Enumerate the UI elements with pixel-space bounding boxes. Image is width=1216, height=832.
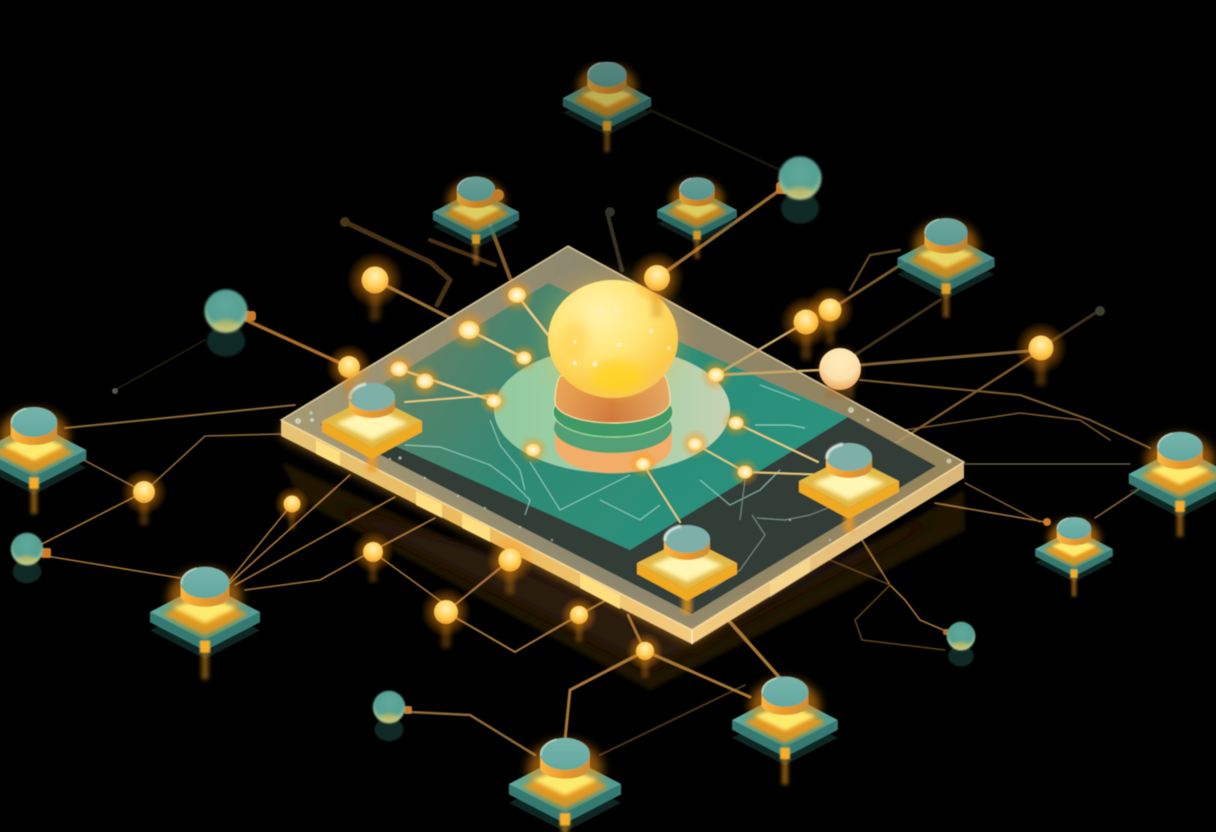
plate reflection shadow bbox=[282, 462, 965, 690]
dim background wires bbox=[115, 110, 1100, 755]
reflection under sphere bbox=[555, 425, 672, 473]
plate glow bbox=[281, 422, 964, 646]
plate left side bbox=[281, 420, 692, 644]
node: top centre bbox=[563, 62, 651, 152]
glass chip plate bbox=[281, 246, 964, 646]
large pale ball bbox=[813, 342, 867, 399]
plate top surface bbox=[281, 246, 964, 630]
surface speckles bbox=[295, 407, 952, 541]
node: bottom centre bbox=[509, 738, 621, 832]
on-plate wires bbox=[399, 295, 840, 522]
node: far right bbox=[1129, 432, 1216, 537]
plate rim highlight bbox=[281, 246, 964, 630]
glowing junction balls off plate bbox=[121, 251, 1067, 678]
copper base bbox=[555, 376, 670, 423]
green ring bbox=[553, 387, 673, 437]
chip node: left on plate bbox=[322, 383, 422, 472]
node: lower left bbox=[150, 567, 260, 679]
node: lower right bbox=[732, 676, 838, 785]
central glowing sphere bbox=[543, 275, 683, 403]
dark substrate bbox=[320, 417, 936, 614]
plate right side bbox=[692, 462, 964, 644]
green reflection band bbox=[554, 403, 672, 453]
surface cracks bbox=[405, 385, 835, 590]
node: upper left bbox=[433, 176, 519, 265]
bright wires bbox=[40, 190, 1150, 755]
dim wire end dots bbox=[112, 207, 1105, 394]
side highlight blocks bbox=[316, 440, 620, 609]
chip node: bottom on plate bbox=[637, 525, 737, 614]
green panel bbox=[362, 283, 848, 550]
chip node: right on plate bbox=[799, 443, 899, 532]
glowing dots on plate bbox=[382, 277, 760, 487]
small teal spheres with connectors bbox=[11, 156, 1051, 741]
node: far left bbox=[0, 407, 86, 514]
node: upper right bbox=[897, 218, 995, 317]
central halo bbox=[494, 347, 730, 473]
node: right lower bbox=[1035, 517, 1113, 597]
node: upper middle bbox=[657, 177, 737, 259]
